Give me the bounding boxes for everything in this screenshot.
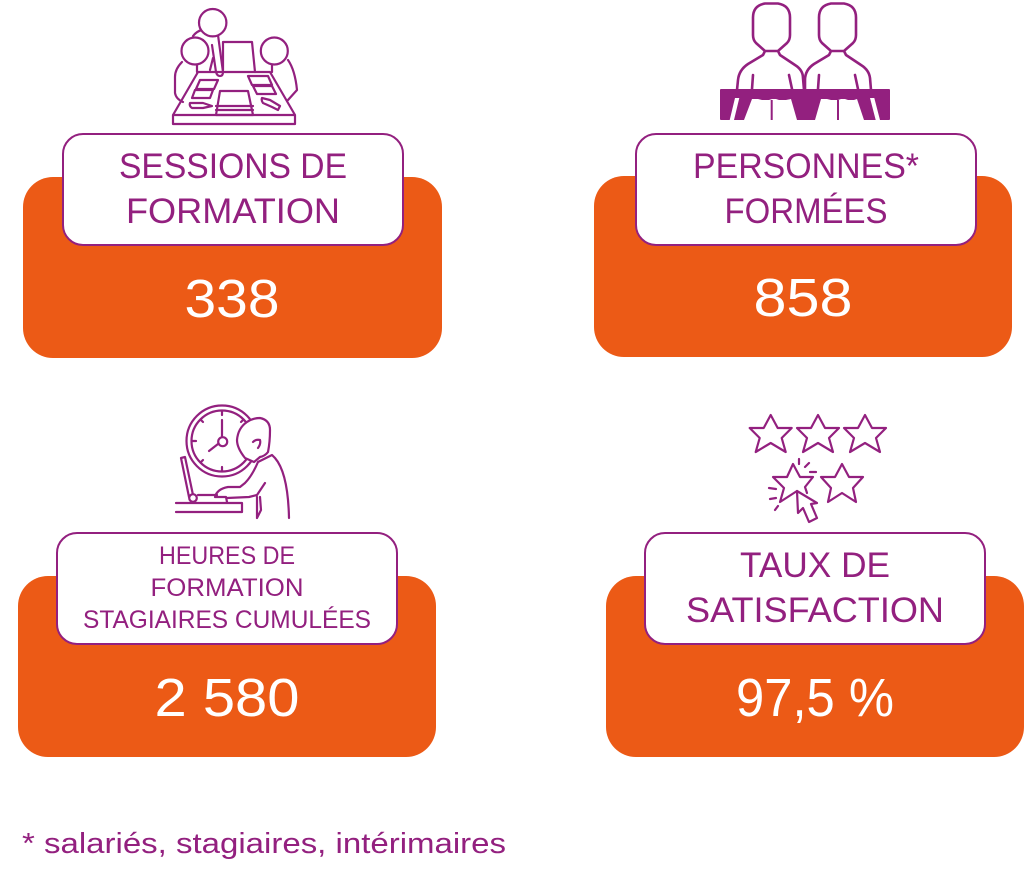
label card: FORMATION bbox=[126, 192, 340, 231]
orange panel bbox=[18, 576, 436, 757]
icon: meeting around a table bbox=[173, 9, 297, 124]
label card bbox=[57, 533, 397, 644]
panel: personnes formées bbox=[594, 134, 1012, 357]
label card: SATISFACTION bbox=[686, 591, 944, 630]
label card: FORMATION bbox=[150, 574, 304, 602]
label card: FORMÉES bbox=[724, 192, 888, 231]
label card bbox=[645, 533, 985, 644]
value: 2 580 bbox=[154, 668, 300, 728]
label card: TAUX DE bbox=[740, 546, 890, 585]
icon: two seated people bbox=[720, 4, 890, 120]
icon: person in front of clock at computer bbox=[176, 406, 289, 518]
label card: HEURES DE bbox=[159, 542, 295, 570]
label card: STAGIAIRES CUMULÉES bbox=[83, 605, 371, 634]
label card: PERSONNES* bbox=[693, 147, 919, 186]
label card bbox=[63, 134, 403, 245]
value: 338 bbox=[184, 269, 280, 329]
orange panel bbox=[23, 177, 442, 358]
value: 858 bbox=[754, 268, 852, 328]
panel: sessions de formation bbox=[23, 134, 442, 358]
label card bbox=[636, 134, 976, 245]
orange panel bbox=[594, 176, 1012, 357]
orange panel bbox=[606, 576, 1024, 757]
value: 97,5 % bbox=[736, 668, 894, 728]
label card: SESSIONS DE bbox=[119, 147, 347, 186]
panel: taux de satisfaction bbox=[606, 533, 1024, 757]
footnote: * salariés, stagiaires, intérimaires bbox=[22, 828, 506, 860]
icon: rating stars with cursor bbox=[750, 415, 886, 522]
panel: heures de formation bbox=[18, 533, 436, 757]
